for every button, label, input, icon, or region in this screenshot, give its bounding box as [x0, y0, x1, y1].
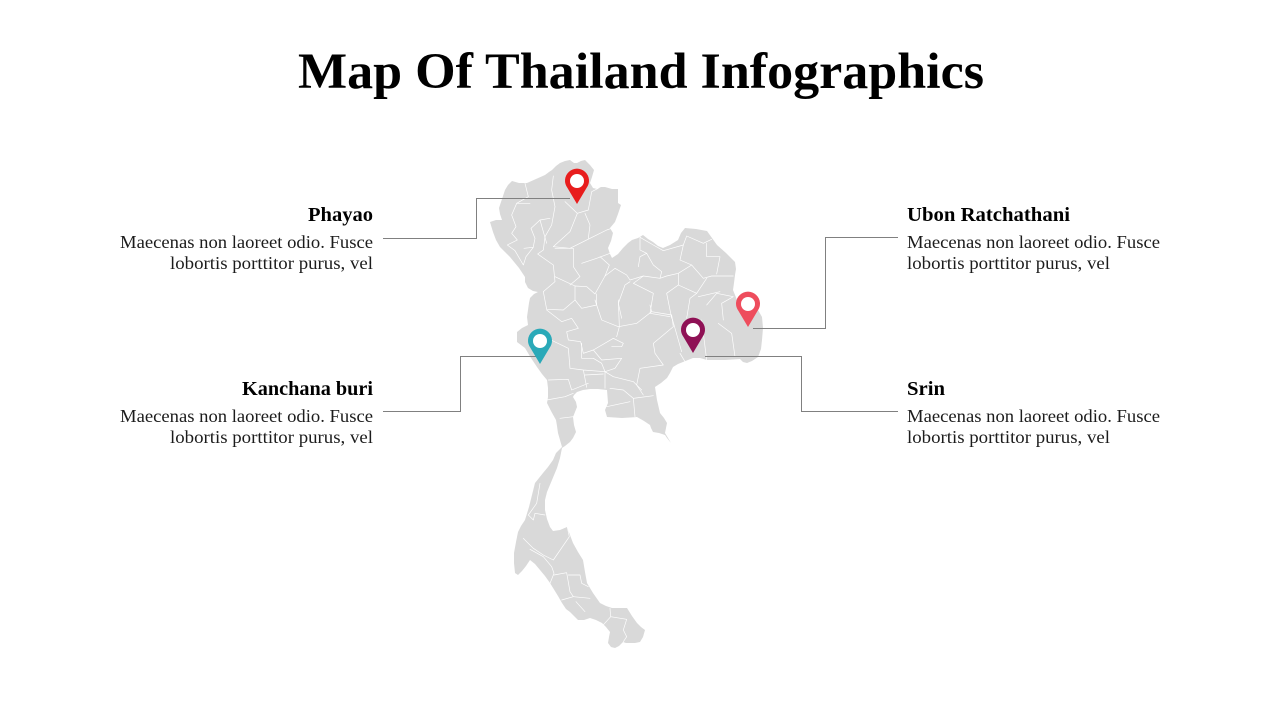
text block: Ubon Ratchathani: lobortis porttitor purus, vel	[907, 253, 1110, 273]
pin: Kanchana buri (teal)	[528, 329, 552, 364]
text block: Ubon Ratchathani	[907, 204, 1160, 273]
connector: Ubon Ratchathani	[753, 238, 898, 328]
province borders north and northeast	[507, 176, 733, 320]
text block: Phayao	[120, 204, 373, 273]
text block: Kanchana buri: lobortis porttitor purus, vel	[170, 427, 373, 447]
pin: Srin (purple)	[681, 318, 705, 353]
text block: Srin: lobortis porttitor purus, vel	[907, 427, 1110, 447]
connector: Srin	[705, 356, 898, 412]
text block: Kanchana buri: Maecenas non laoreet odio. Fusce	[120, 406, 373, 426]
text block: Phayao: lobortis porttitor purus, vel	[170, 253, 373, 273]
text block: Phayao: Maecenas non laoreet odio. Fusce	[120, 232, 373, 252]
pin: Ubon Ratchathani (coral)	[736, 292, 760, 327]
text block: Phayao: Phayao	[308, 204, 373, 226]
map of Thailand	[490, 160, 763, 648]
text block: Kanchana buri: Kanchana buri	[242, 378, 373, 400]
connector: Phayao	[383, 198, 570, 238]
title: Map Of Thailand Infographics	[298, 44, 984, 100]
text block: Kanchana buri	[120, 378, 373, 447]
text block: Srin	[907, 378, 1160, 447]
text block: Ubon Ratchathani: Ubon Ratchathani	[907, 204, 1070, 226]
pin: Phayao (red)	[565, 169, 589, 204]
province borders peninsula	[523, 483, 627, 642]
text block: Ubon Ratchathani: Maecenas non laoreet odio. Fusce	[907, 232, 1160, 252]
text block: Srin: Maecenas non laoreet odio. Fusce	[907, 406, 1160, 426]
text block: Srin: Srin	[907, 378, 945, 400]
connector: Kanchana buri	[383, 356, 537, 412]
province borders central and south-east	[547, 300, 735, 418]
